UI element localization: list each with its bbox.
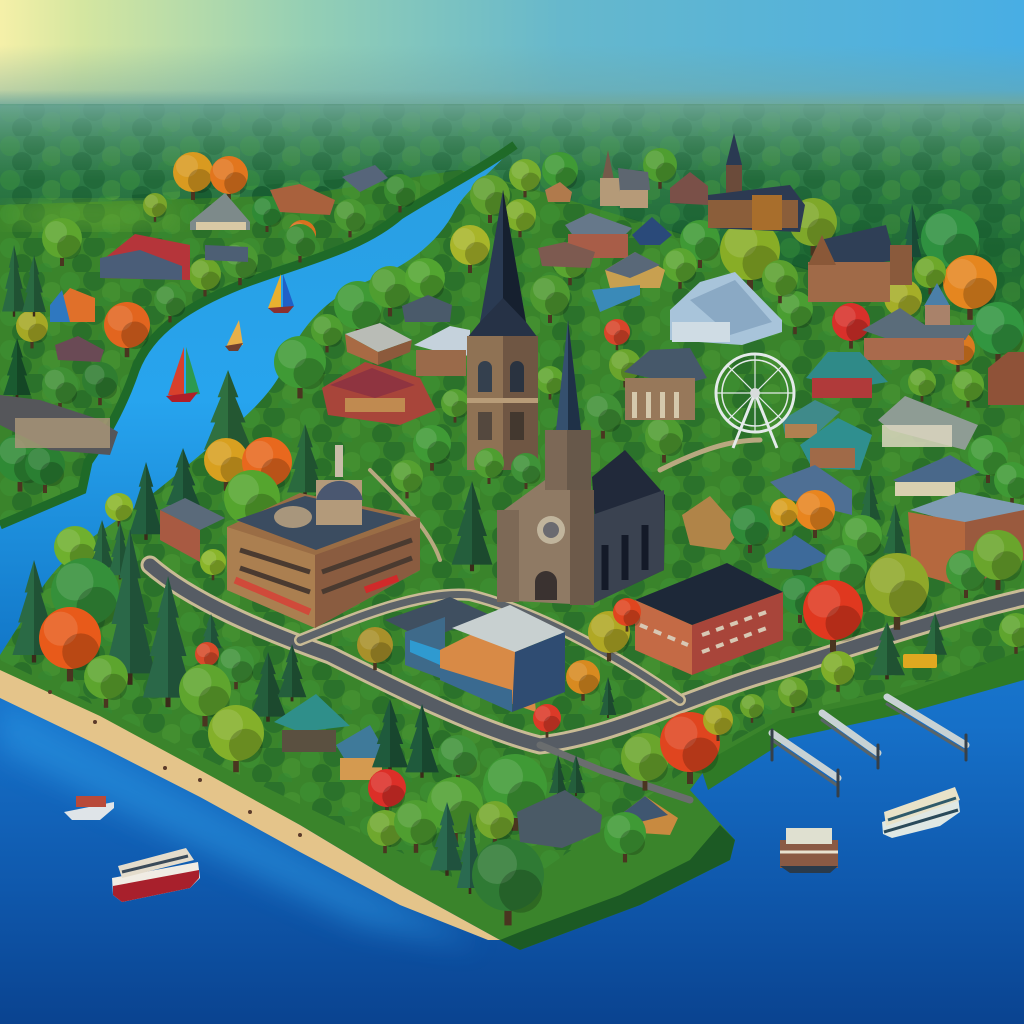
yellow cottage	[336, 725, 390, 780]
peninsula dark shore edge	[500, 825, 735, 950]
domed civic building	[227, 445, 420, 628]
central trees behind landmarks	[105, 258, 469, 540]
shops block	[385, 597, 565, 712]
grey roof house	[878, 396, 978, 450]
pier 1	[772, 730, 838, 796]
small boat: left	[64, 796, 114, 820]
river left bank edge	[0, 145, 515, 525]
far right brick house	[988, 352, 1024, 405]
sailboat: small	[225, 320, 243, 351]
small cottage mid right	[682, 496, 830, 570]
pier 2	[822, 713, 878, 768]
low house row	[770, 455, 980, 515]
tan chapel	[600, 150, 650, 208]
beach	[0, 670, 500, 940]
peninsula trees and cottages	[357, 598, 937, 925]
beachgoers	[48, 690, 302, 837]
roads	[150, 440, 1024, 800]
mid left buildings	[322, 295, 470, 425]
lake	[0, 480, 1024, 1024]
back row trees	[0, 148, 1024, 505]
red roof cottage	[806, 352, 888, 398]
stone church	[497, 320, 665, 605]
piers	[772, 697, 966, 796]
building: flat roof pavilion	[345, 323, 412, 365]
canopy texture over land	[0, 170, 1024, 900]
gazebo	[274, 694, 350, 752]
building: white hall	[414, 326, 470, 376]
colonnade hall	[624, 348, 707, 420]
sailboat: red and green	[166, 347, 200, 402]
foreground left trees	[12, 520, 306, 772]
right shoreline reeds	[700, 650, 1024, 790]
gothic church back	[708, 133, 805, 232]
ferris wheel	[716, 354, 794, 448]
building: arcade hall	[322, 362, 436, 425]
sailboats	[166, 274, 294, 402]
upper right village buildings	[538, 133, 1024, 588]
ferry: right	[882, 787, 960, 838]
yellow house	[592, 252, 665, 312]
sky	[0, 0, 1024, 110]
brick church right	[808, 225, 912, 302]
right brick office	[908, 492, 1024, 588]
tall cathedral tower	[467, 190, 538, 470]
grass clearing: upper left	[0, 203, 180, 227]
brick manor	[565, 213, 632, 258]
town and bank land	[0, 170, 1024, 950]
small village houses	[545, 172, 708, 205]
domed mansion	[862, 283, 975, 360]
building: small house	[402, 295, 452, 322]
pier 3	[887, 697, 966, 760]
brick building	[635, 563, 783, 675]
teal cottage cluster	[782, 400, 872, 470]
distant forest	[0, 90, 1024, 400]
riverboat: right	[780, 828, 838, 873]
shallow water along beach	[0, 700, 480, 945]
white warehouse	[670, 272, 782, 345]
sailboat: blue	[268, 274, 294, 313]
river	[0, 145, 515, 655]
ferry: bottom left	[112, 848, 200, 902]
left bank buildings	[0, 165, 388, 455]
mid right trees	[391, 448, 1024, 692]
small left brick building	[160, 498, 225, 562]
